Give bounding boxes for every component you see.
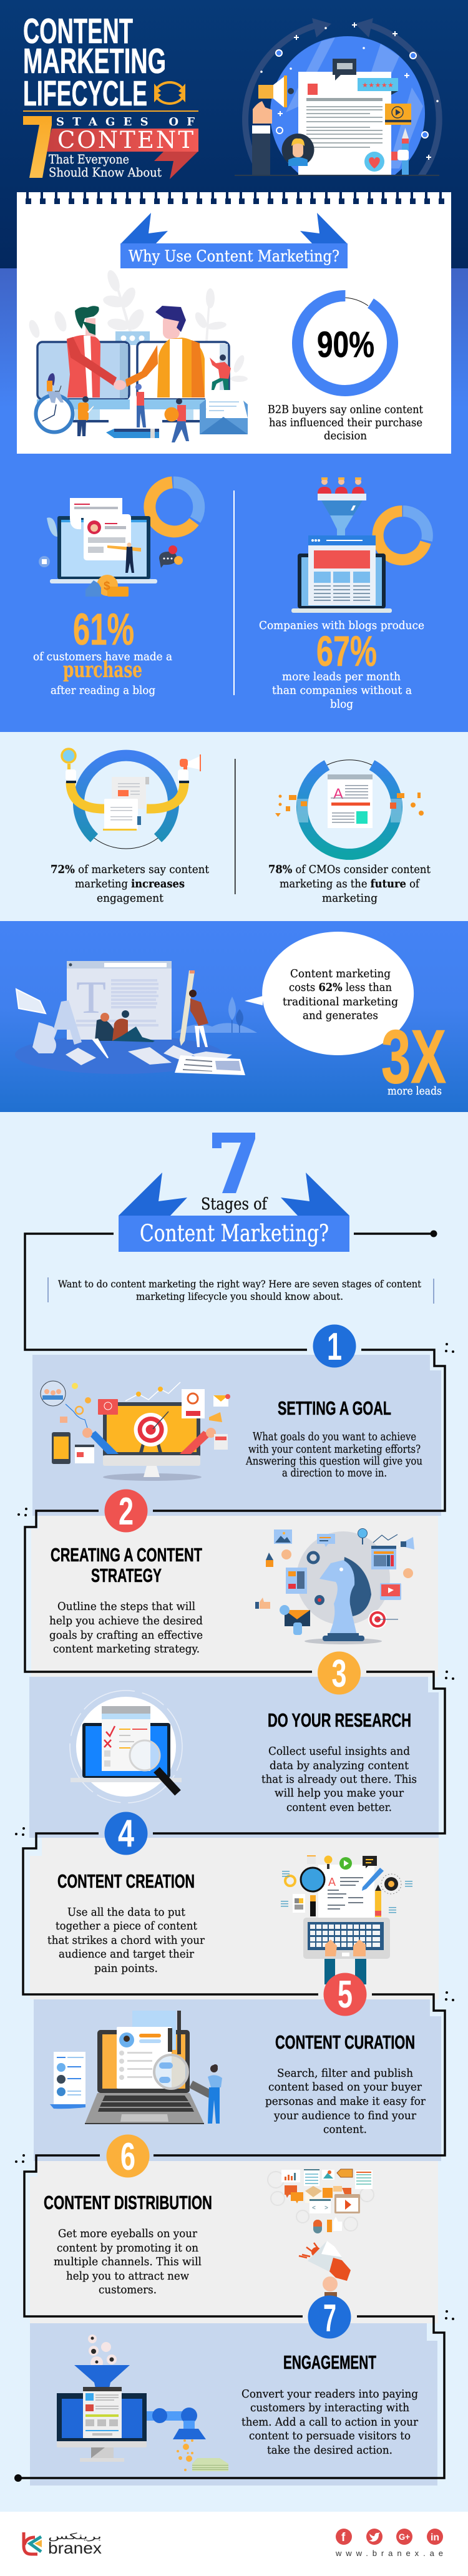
intro text	[47, 1277, 434, 1304]
seated woman	[47, 373, 64, 403]
blue circle	[270, 36, 425, 175]
person with laptop	[77, 396, 94, 436]
ribbon tails	[119, 1173, 349, 1216]
badge 5: 5	[338, 1973, 353, 2016]
glow bands	[297, 799, 308, 822]
chat bubble	[115, 331, 150, 345]
body	[49, 1600, 203, 1656]
title: content marketing lifecycle: CONTENT	[23, 11, 133, 51]
background: light stats section	[0, 732, 468, 921]
icon: cycle arrows	[154, 82, 185, 104]
rating box	[358, 78, 398, 95]
seated couple	[95, 1019, 114, 1041]
illustration: ring with page: A	[333, 786, 343, 803]
ribbon label: Content Marketing?	[140, 1220, 329, 1247]
badge 6	[106, 2134, 150, 2178]
illustration: people writing	[15, 961, 257, 1075]
stat text bottom	[272, 670, 412, 711]
corner dots	[15, 1343, 454, 2320]
icon: google plus: G+	[399, 2532, 410, 2542]
badge 3	[318, 1651, 361, 1695]
body: personas and make it easy for	[265, 2095, 426, 2108]
circular arrows	[245, 18, 439, 178]
stat text: 72% of marketers say content	[51, 863, 210, 876]
body: goals by crafting an effective	[49, 1629, 203, 1642]
document spread	[175, 1055, 245, 1075]
subtitle text: STAGES OF	[56, 115, 195, 129]
stat text top: Companies with blogs produce	[259, 619, 424, 632]
illustration: handshake	[27, 268, 248, 442]
loose papers	[66, 1045, 232, 1065]
body: Collect useful insights and	[268, 1745, 410, 1758]
stat text	[51, 863, 210, 905]
perforation strip	[26, 192, 444, 204]
stat text bottom: more leads per month	[282, 670, 401, 683]
heading: CREATING A CONTENT	[51, 1544, 202, 1566]
badge 4	[105, 1812, 147, 1855]
body: help you achieve the desired	[49, 1614, 203, 1627]
centre woman	[135, 384, 146, 427]
body: take the desired action.	[267, 2444, 392, 2457]
intro text: marketing lifecycle you should know about.	[136, 1290, 343, 1302]
logo arabic wordmark: برينكس	[48, 2532, 102, 2542]
body: content.	[323, 2123, 367, 2136]
stage 1: setting a goal	[41, 1381, 422, 1481]
body: your audience to find your	[273, 2109, 416, 2122]
stage 2: creating a content strategy	[49, 1529, 414, 1656]
stat text: b2b buyers: decision	[324, 429, 367, 442]
heading: DO YOUR RESEARCH	[268, 1709, 411, 1731]
badge 4: 4	[118, 1812, 134, 1855]
badge 7	[308, 2295, 351, 2340]
background: light stages section	[0, 1112, 468, 2512]
body: Get more eyeballs on your	[58, 2227, 197, 2240]
ribbon: content banner	[46, 129, 198, 179]
video box	[385, 104, 411, 125]
footer: social icons	[335, 2529, 443, 2558]
body: customers by interacting with	[250, 2401, 409, 2414]
panel: why use content marketing	[17, 192, 451, 454]
illustration: funnel and laptop	[291, 477, 392, 613]
stat text: purchase	[63, 657, 142, 683]
connector line	[14, 1231, 445, 2482]
megaphone	[183, 764, 187, 777]
illustration: megaphone with content icons	[268, 2169, 374, 2297]
stat text: after reading a blog	[51, 684, 155, 697]
stat text: engagement	[97, 892, 164, 905]
speech bubble: and generates	[303, 1009, 378, 1022]
illustration: laptop with resume	[39, 498, 183, 597]
illustration: ring with documents	[62, 749, 201, 849]
envelope	[200, 390, 248, 434]
panel: cost comparison band	[15, 932, 446, 1099]
background leaves	[27, 268, 248, 382]
body	[245, 1430, 422, 1480]
left man	[67, 306, 117, 398]
heart badge	[364, 152, 384, 172]
body: audience and target their	[59, 1948, 194, 1961]
browser page	[308, 535, 376, 605]
stat: 72 percent engagement	[51, 749, 210, 905]
body: content to persuade visitors to	[249, 2429, 411, 2442]
right man	[125, 306, 205, 398]
illustration: conversion funnel machine	[57, 2334, 228, 2471]
speech bubble	[245, 932, 414, 1055]
heading: SETTING A GOAL	[278, 1397, 391, 1419]
speech bubble	[333, 59, 356, 80]
stage 6: content distribution	[44, 2169, 374, 2297]
donut chart left	[150, 482, 199, 532]
stage 7: engagement	[57, 2334, 418, 2471]
stages of label: Stages of	[201, 1195, 268, 1214]
stat text bottom: blog	[330, 698, 353, 711]
heading: STRATEGY	[91, 1564, 162, 1586]
side icons	[275, 793, 424, 817]
avatar	[282, 134, 314, 166]
pencil	[106, 429, 159, 438]
stat: 67 percent leads	[259, 477, 427, 711]
background: dark header	[0, 0, 468, 268]
title: content marketing lifecycle: LIFECYCLE	[23, 74, 147, 114]
body: with your content marketing efforts?	[248, 1443, 421, 1456]
browser window	[67, 961, 172, 1040]
body	[261, 1745, 417, 1814]
badge 2	[105, 1489, 147, 1533]
body: content by promoting it on	[57, 2242, 198, 2255]
footer: branex logo	[24, 2532, 102, 2557]
magnifier	[67, 764, 71, 776]
body: them. Add a call to action in your	[241, 2416, 418, 2429]
illustration: people writing: T	[76, 972, 106, 1023]
icon: facebook	[336, 2529, 352, 2545]
illustration: megaphone with content icons: <>	[312, 2205, 328, 2212]
caption: more leads: more leads	[388, 1085, 442, 1098]
icon: linkedin	[427, 2529, 443, 2545]
light stripes	[286, 37, 423, 168]
ribbon heading: Why Use Content Marketing?	[129, 247, 339, 265]
donut chart right	[378, 511, 427, 560]
body: Answering this question will give you	[245, 1455, 422, 1468]
subtitle text: Should Know About	[49, 165, 162, 180]
decorative sparkles	[260, 22, 439, 160]
notebook sheet	[17, 192, 451, 454]
stat text: marketing as the future of	[280, 877, 420, 890]
icon: linkedin: in	[431, 2532, 439, 2543]
body: together a piece of content	[56, 1920, 198, 1933]
heading: ENGAGEMENT	[283, 2351, 376, 2373]
stat text: marketing increases	[75, 877, 185, 890]
donut: 90 percent: 90%	[317, 324, 374, 365]
stat text: of customers have made a	[33, 650, 172, 663]
badge 3: 3	[332, 1652, 347, 1695]
body: a direction to move in.	[282, 1466, 387, 1480]
body: content even better.	[286, 1801, 392, 1814]
figure: 67 percent: 67%	[316, 627, 377, 675]
heading: 7 stages of content marketing	[119, 1133, 349, 1252]
stat text	[33, 650, 172, 697]
step badges	[105, 1324, 367, 2340]
subtitle text: CONTENT	[57, 127, 193, 154]
logo mark	[24, 2532, 42, 2554]
heading	[51, 1544, 202, 1586]
donut: 90 percent	[298, 296, 392, 391]
stage 4: content creation	[47, 1855, 412, 1984]
title: content marketing lifecycle: MARKETING	[23, 41, 166, 81]
document page	[298, 72, 391, 175]
speech bubble: costs 62% less than	[289, 981, 392, 994]
page	[328, 774, 373, 828]
stat text: marketing	[322, 892, 378, 905]
body	[54, 2227, 202, 2296]
body: Outline the steps that will	[57, 1600, 195, 1613]
ribbon	[119, 1216, 349, 1252]
audience figures	[318, 477, 364, 494]
documents	[112, 777, 146, 809]
stage 3: do your research	[70, 1690, 417, 1814]
website address: www.branex.ae	[335, 2549, 443, 2558]
body: customers.	[99, 2283, 157, 2296]
illustration: laptop with magnifier	[70, 1690, 182, 1803]
body: Convert your readers into paying	[241, 2388, 418, 2401]
stage 5: content curation	[50, 2011, 426, 2136]
handshake	[114, 380, 126, 390]
body	[47, 1906, 205, 1975]
stat text	[268, 863, 431, 905]
stat text bottom: than companies without a	[272, 684, 412, 697]
body: content marketing strategy.	[53, 1642, 200, 1656]
illustration: laptop with resume: $	[104, 580, 110, 593]
right monitor	[137, 342, 230, 422]
badge 5	[323, 1973, 367, 2016]
pencil and thumb	[391, 128, 409, 176]
clock	[36, 396, 72, 432]
icon: google plus	[396, 2529, 412, 2545]
body: content based on your buyer	[268, 2081, 422, 2094]
stat: 61 percent blog purchase	[33, 482, 199, 697]
divider: white vertical	[233, 490, 235, 695]
stat: 78 percent future	[268, 760, 431, 905]
illustration: keyboard with content	[281, 1855, 412, 1984]
icon: twitter	[366, 2529, 383, 2545]
ground line	[235, 175, 439, 176]
illustration: target monitor	[41, 1381, 230, 1481]
badge 1	[313, 1324, 356, 1368]
hero illustration: content document with megaphone	[235, 18, 439, 191]
numeral 7	[23, 116, 52, 178]
illustration: keyboard with content: A	[328, 1876, 336, 1888]
illustration: laptop with profile	[50, 2011, 222, 2124]
body: will help you make your	[275, 1787, 404, 1800]
body: Search, filter and publish	[277, 2067, 413, 2080]
intro text: Want to do content marketing the right way? Here are seven stages of content	[58, 1278, 422, 1290]
stat text: b2b buyers: B2B buyers say online content	[268, 403, 424, 416]
divider line	[23, 110, 198, 112]
numeral 7	[212, 1133, 255, 1193]
illustration: chess knight strategy	[255, 1529, 414, 1644]
giant pencil	[180, 970, 195, 1046]
letters	[16, 989, 46, 1013]
body: What goals do you want to achieve	[253, 1430, 416, 1443]
badge 7: 7	[323, 2297, 336, 2340]
illustration: ring with page	[275, 760, 424, 854]
title: content marketing lifecycle	[23, 11, 166, 114]
background: footer	[0, 2512, 468, 2576]
woman	[190, 998, 208, 1026]
badge 1: 1	[327, 1325, 342, 1368]
subtitle text: That Everyone	[49, 152, 129, 167]
left monitor	[37, 342, 130, 422]
speech bubble: Content marketing	[290, 967, 391, 980]
body: that is already out there. This	[261, 1773, 417, 1786]
panel fills	[29, 1355, 441, 2486]
badge 2: 2	[119, 1490, 134, 1533]
background: blue band	[0, 921, 468, 1112]
figure: 61 percent: 61%	[73, 605, 134, 655]
title block	[23, 11, 198, 180]
body: data by analyzing content	[270, 1759, 409, 1772]
rating box: ★★★★★	[362, 81, 394, 89]
stat text: 78% of CMOs consider content	[268, 863, 431, 876]
ribbon heading	[120, 213, 348, 268]
megaphone and hand	[252, 76, 294, 176]
ring dots	[276, 50, 428, 138]
icon: facebook: f	[341, 2531, 346, 2544]
speech bubble: traditional marketing	[283, 995, 398, 1008]
divider: black vertical	[235, 759, 236, 894]
body: multiple channels. This will	[54, 2255, 202, 2268]
funnel	[318, 494, 366, 500]
body	[265, 2067, 426, 2136]
person climbing	[210, 354, 231, 402]
yellow arms	[71, 782, 107, 809]
body	[241, 2388, 418, 2457]
laptop	[298, 554, 386, 608]
stat text: b2b buyers	[268, 403, 424, 442]
body: Use all the data to put	[67, 1906, 186, 1919]
badge 6: 6	[120, 2135, 135, 2178]
logo latin wordmark: branex	[48, 2539, 102, 2557]
heading: CONTENT DISTRIBUTION	[44, 2192, 212, 2213]
person with coin	[165, 398, 189, 442]
heading: CONTENT CREATION	[57, 1870, 195, 1892]
subtitle text	[49, 115, 195, 180]
body: help you to attract new	[66, 2270, 190, 2283]
body: pain points.	[94, 1962, 158, 1975]
background: blue stats section	[0, 268, 468, 732]
body: that strikes a chord with your	[47, 1934, 205, 1947]
stat text: b2b buyers: has influenced their purchase	[269, 416, 422, 429]
